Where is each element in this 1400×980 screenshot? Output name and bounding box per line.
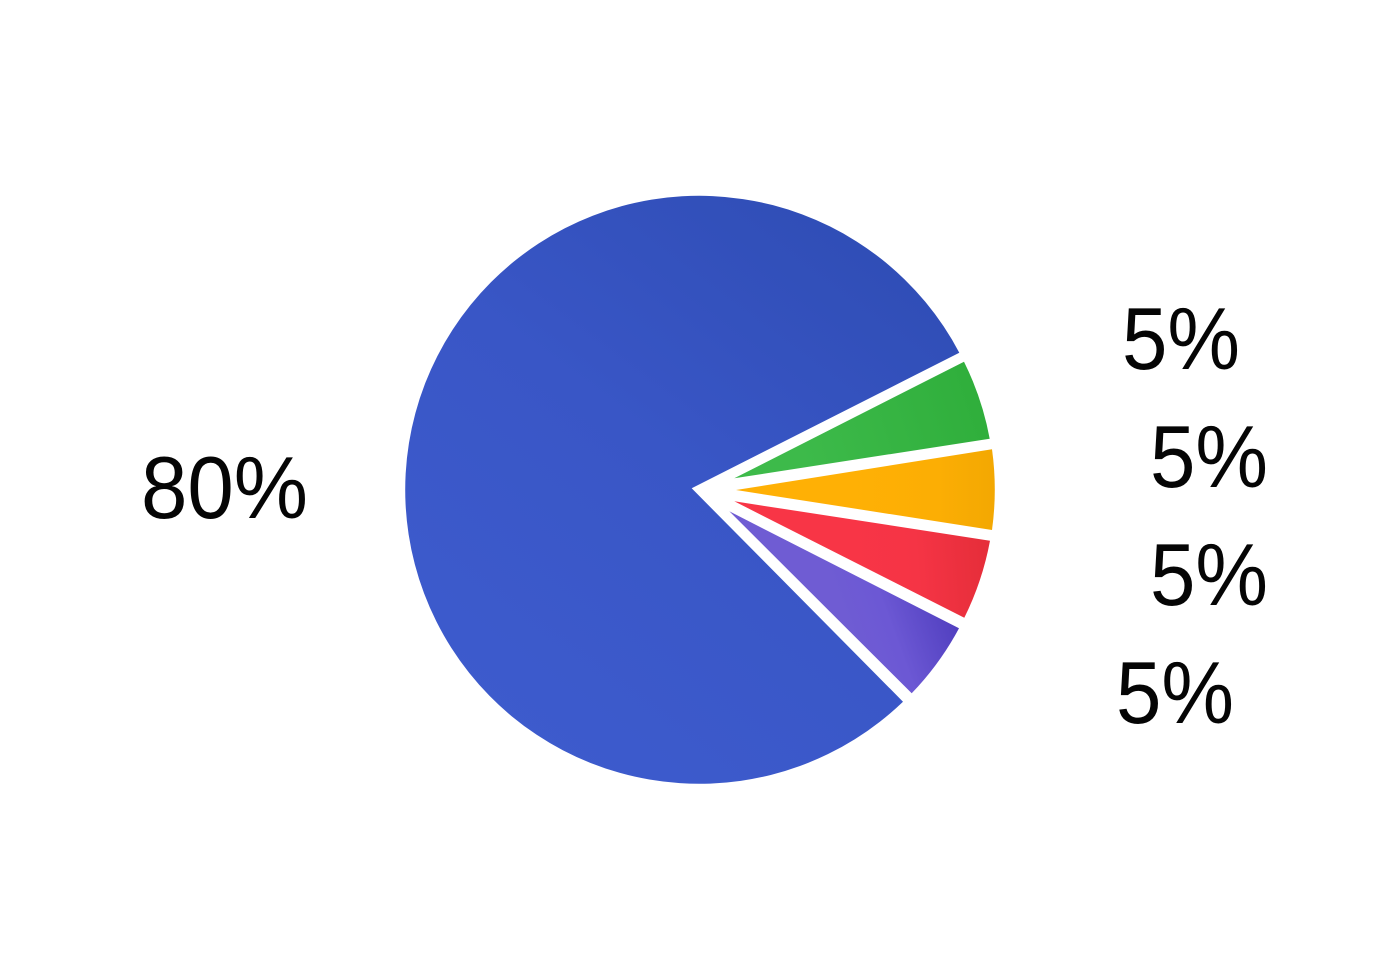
slice: green 5% — [734, 362, 990, 478]
slice: blue 80% — [405, 196, 959, 784]
pie chart — [405, 196, 995, 784]
label: 5% red: 5% — [1150, 525, 1268, 624]
slice: yellow 5% — [736, 449, 995, 530]
slice: purple 5% — [729, 511, 959, 693]
label: 5% purple: 5% — [1116, 643, 1234, 742]
slice: red 5% — [734, 501, 990, 618]
label: 5% green: 5% — [1122, 289, 1240, 388]
label: 80%: 80% — [141, 438, 308, 537]
label: 5% yellow: 5% — [1150, 407, 1268, 506]
